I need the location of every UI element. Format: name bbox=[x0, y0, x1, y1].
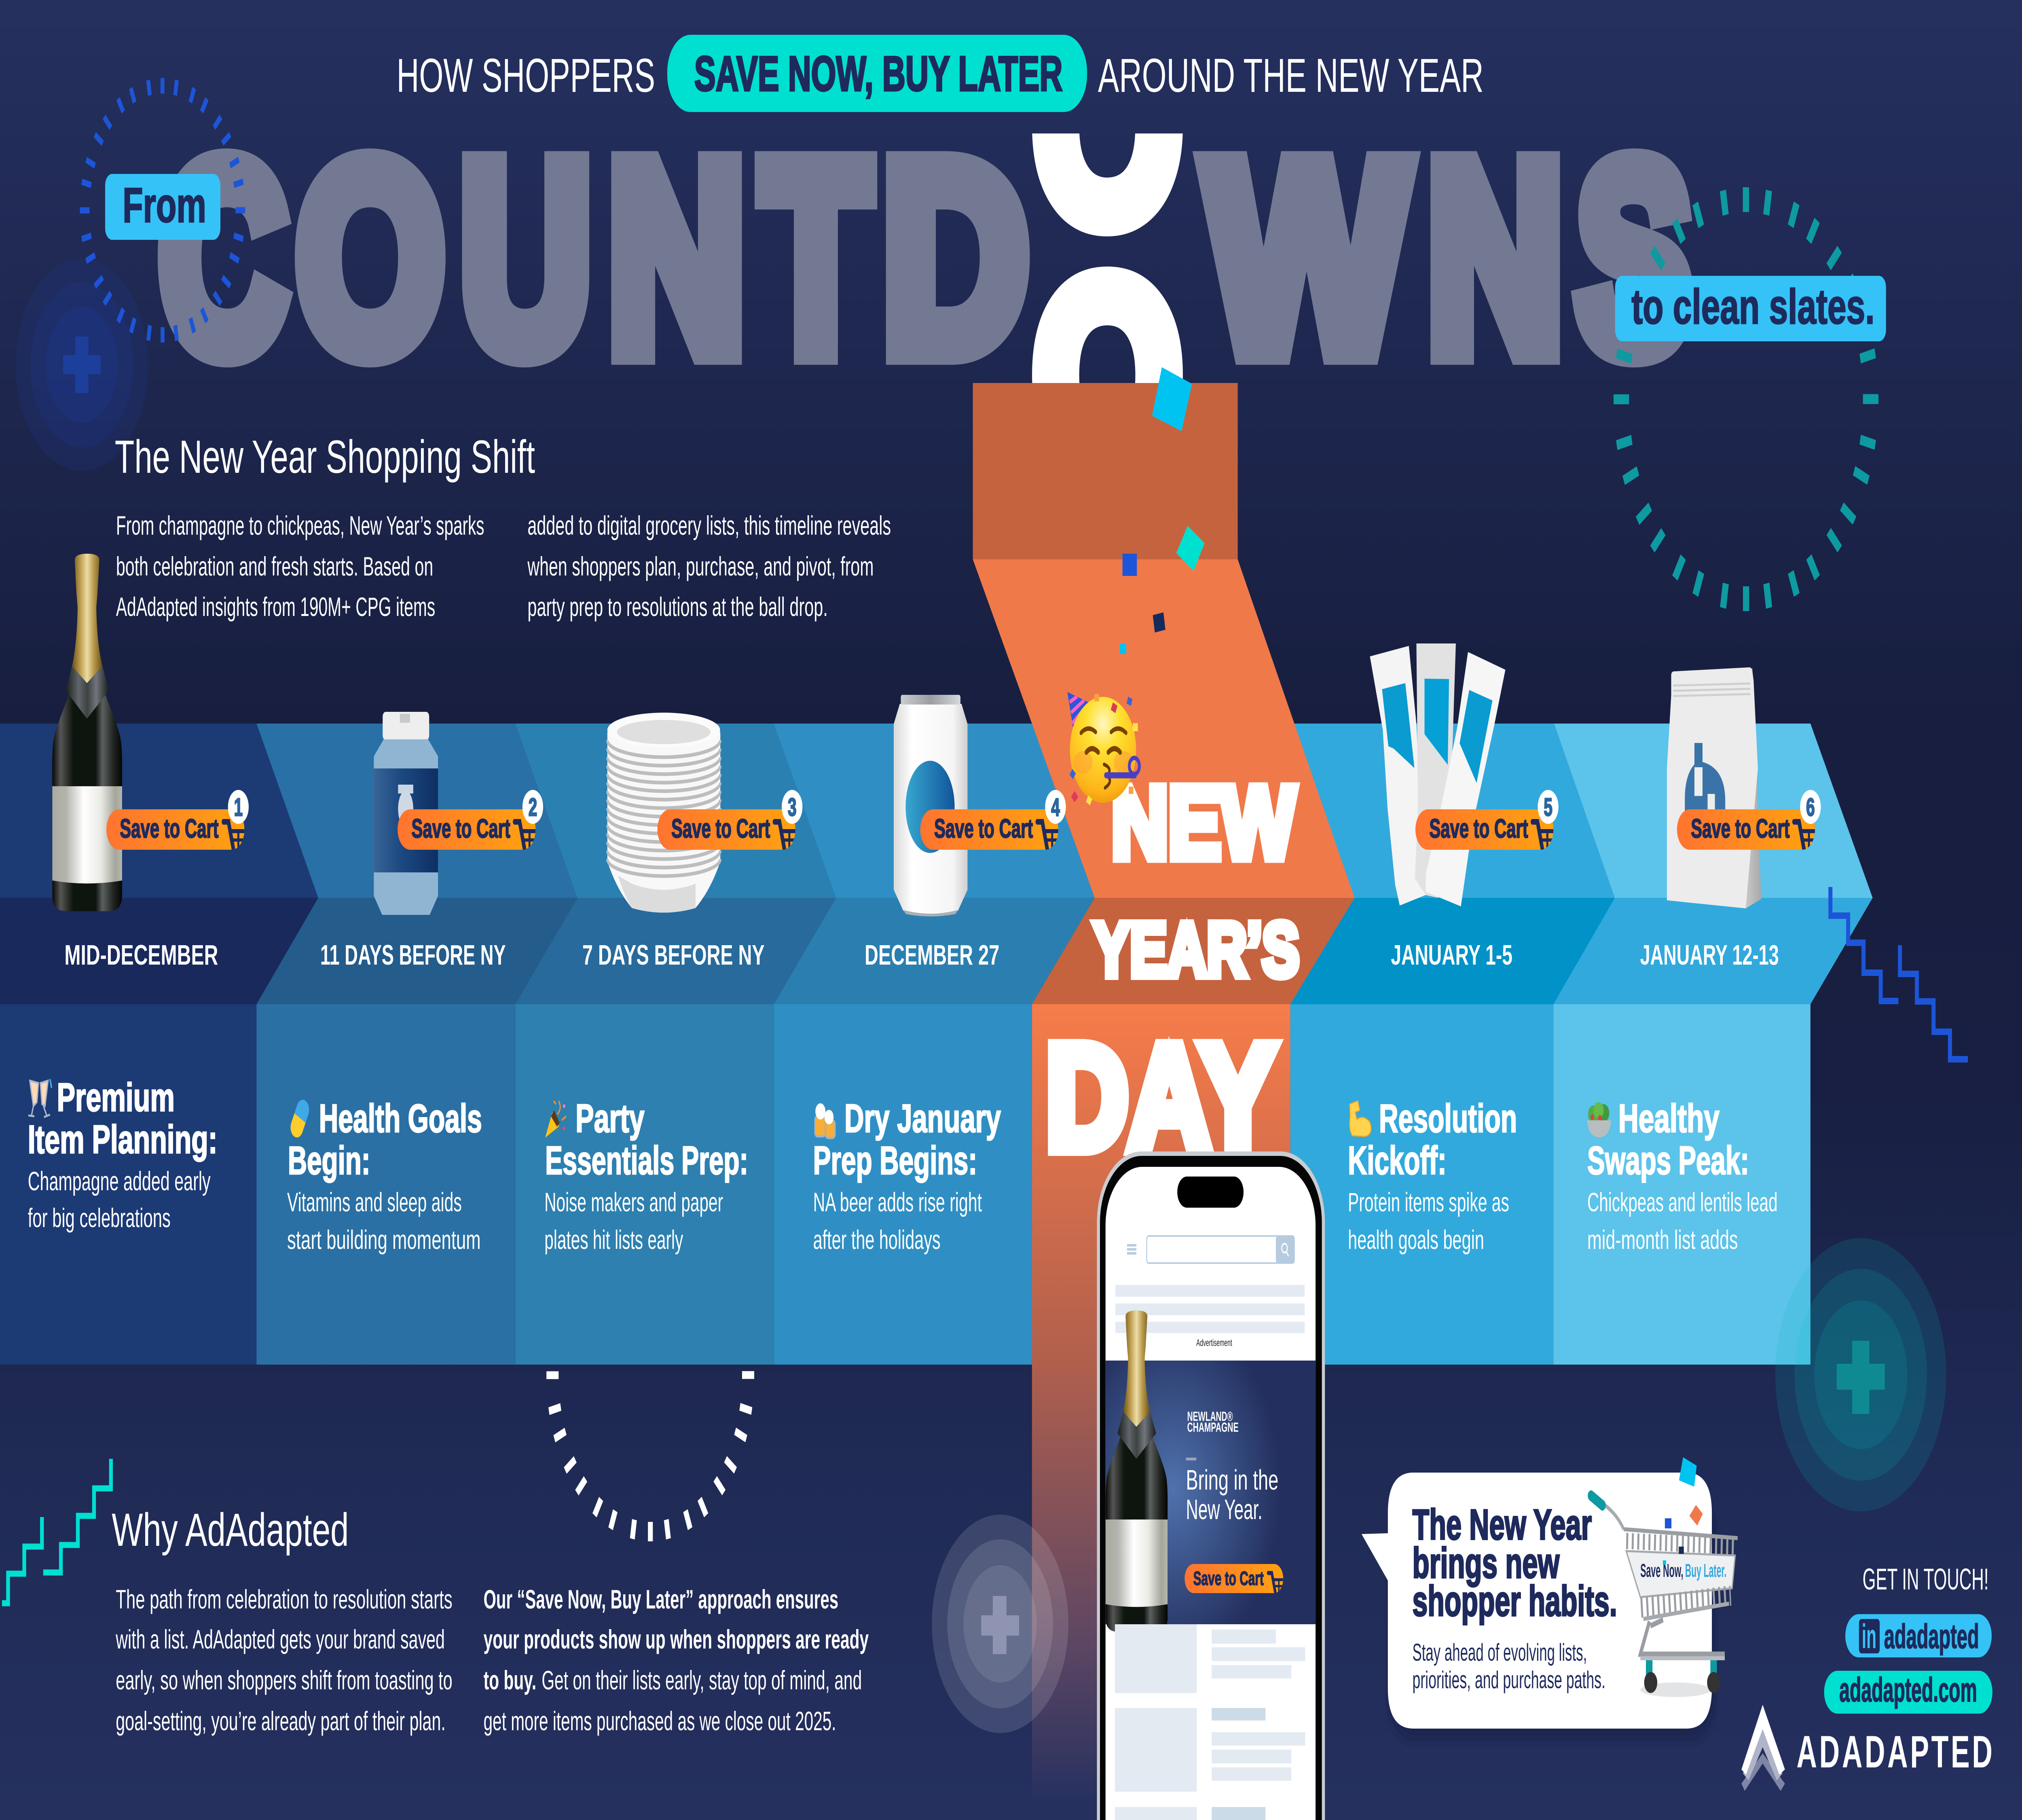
plus target: top left bbox=[16, 259, 148, 471]
badge: save to cart 2: 2 bbox=[529, 793, 537, 821]
orange label band bbox=[1032, 898, 1354, 1004]
search box bbox=[1147, 1236, 1294, 1263]
logo: AdAdapted bbox=[1741, 1705, 1992, 1791]
header line bbox=[397, 35, 1484, 112]
product: water bottle bbox=[374, 712, 438, 915]
ad save to cart button: Save to Cart bbox=[1193, 1568, 1264, 1589]
panel: resolution kickoff bbox=[1348, 1096, 1517, 1255]
heading: YEAR'S: YEAR’S bbox=[1093, 907, 1299, 993]
bubble shape bbox=[1362, 1473, 1712, 1729]
linkedin pill: in bbox=[1862, 1617, 1876, 1655]
brand name bbox=[1187, 1409, 1238, 1435]
panel text bbox=[1348, 1187, 1509, 1255]
website pill: adadapted.com bbox=[1839, 1671, 1977, 1709]
panel: healthy swaps peak: Swaps Peak: bbox=[1587, 1139, 1749, 1183]
panel text: after the holidays bbox=[813, 1225, 941, 1255]
timeline date labels: MID-DECEMBER bbox=[64, 940, 218, 971]
panel title: Dry January bbox=[844, 1096, 1001, 1141]
badge: save to cart 3: Save to Cart bbox=[671, 813, 770, 843]
brand name: NEWLAND® bbox=[1187, 1409, 1233, 1424]
stair line: teal bbox=[2, 1459, 111, 1603]
intro left column: From champagne to chickpeas, New Year’s sparks bbox=[116, 510, 484, 540]
tag: From: From bbox=[123, 178, 206, 233]
badge: save to cart 5 bbox=[1415, 790, 1559, 851]
timeline date labels: JANUARY 12-13 bbox=[1640, 940, 1779, 971]
panel text: NA beer adds rise right bbox=[813, 1187, 982, 1217]
body left column: goal-setting, you’re already part of their plan. bbox=[116, 1706, 446, 1736]
product: champagne bottle bbox=[52, 554, 122, 911]
chevron 4 bbox=[758, 724, 1095, 1004]
plus target: right teal bbox=[1775, 1238, 1946, 1511]
chevron 5 bbox=[1238, 724, 1615, 1004]
panel text bbox=[287, 1187, 481, 1255]
product: stick packets bbox=[1370, 643, 1505, 906]
browser menu icon bbox=[1127, 1245, 1136, 1253]
title: COUNTDOWNS: U bbox=[461, 107, 591, 408]
stair line: blue bbox=[1830, 887, 1968, 1059]
header text left: HOW SHOPPERS bbox=[397, 49, 655, 102]
body right column bbox=[484, 1584, 869, 1736]
plus target: bottom white bbox=[932, 1515, 1068, 1733]
phone mockup bbox=[1097, 1151, 1325, 1820]
advertisement label: Advertisement bbox=[1196, 1338, 1232, 1348]
badge: save to cart 4: Save to Cart bbox=[934, 813, 1033, 843]
panel text: Protein items spike as bbox=[1348, 1187, 1509, 1217]
product: can bbox=[894, 695, 967, 916]
bubble text: priorities, and purchase paths. bbox=[1412, 1666, 1605, 1693]
panel: party essentials prep bbox=[544, 1096, 748, 1255]
panel text: start building momentum bbox=[287, 1225, 481, 1255]
heading: DAY: DAY bbox=[1046, 1014, 1276, 1181]
timeline date labels: 11 DAYS BEFORE NY bbox=[320, 940, 506, 971]
body right column: Our “Save Now, Buy Later” approach ensures bbox=[484, 1584, 838, 1614]
title: falling white letter O (lower): O bbox=[1034, 225, 1181, 526]
panel text bbox=[1587, 1187, 1778, 1255]
header text right: AROUND THE NEW YEAR bbox=[1098, 49, 1484, 102]
panel text: mid-month list adds bbox=[1587, 1225, 1738, 1255]
logo wordmark: ADADAPTED bbox=[1796, 1726, 1992, 1777]
chevron 6 bbox=[1516, 724, 1873, 1004]
badge: save to cart 2: Save to Cart bbox=[412, 813, 510, 843]
product: pouch bag bbox=[1667, 667, 1761, 908]
product: stack of plates bbox=[607, 713, 720, 912]
tag: to clean slates bbox=[1615, 276, 1886, 341]
body right column: to buy. bbox=[484, 1665, 536, 1695]
callout: speech bubble bbox=[1362, 1457, 1738, 1747]
cart label: Buy Later. bbox=[1685, 1560, 1726, 1581]
chevron 3 bbox=[506, 724, 836, 1004]
badge: save to cart 2 bbox=[398, 790, 543, 851]
panel text: Chickpeas and lentils lead bbox=[1587, 1187, 1778, 1217]
intro left column: both celebration and fresh starts. Based on bbox=[116, 551, 433, 581]
body left column: The path from celebration to resolution starts bbox=[116, 1584, 453, 1614]
bubble headline: shopper habits. bbox=[1412, 1577, 1617, 1625]
badge: save to cart 5: 5 bbox=[1544, 793, 1552, 821]
body right column: your products show up when shoppers are ready bbox=[484, 1624, 869, 1654]
title: COUNTDOWNS: S bbox=[1577, 107, 1691, 408]
timeline date labels: JANUARY 1-5 bbox=[1391, 940, 1512, 971]
orange fading column bbox=[1032, 1004, 1290, 1805]
title: COUNTDOWNS: D bbox=[883, 108, 1028, 408]
dashed ring: blue bbox=[80, 78, 245, 343]
badge: save to cart 3 bbox=[658, 790, 802, 851]
badge: save to cart 4 bbox=[920, 790, 1066, 851]
heading: The New Year Shopping Shift bbox=[115, 431, 535, 483]
dynamic island bbox=[1177, 1177, 1244, 1208]
panel text: for big celebrations bbox=[28, 1203, 171, 1233]
bubble confetti bbox=[1663, 1457, 1703, 1565]
get in touch: GET IN TOUCH! bbox=[1863, 1563, 1989, 1596]
panel text: Champagne added early bbox=[28, 1166, 211, 1196]
timeline band: chevrons bbox=[0, 724, 1873, 1004]
panel: dry january prep begins bbox=[813, 1096, 1001, 1255]
badge: save to cart 5: Save to Cart bbox=[1429, 813, 1528, 843]
panel text: plates hit lists early bbox=[544, 1225, 683, 1255]
icon: party popper bbox=[545, 1101, 566, 1138]
panel text: Vitamins and sleep aids bbox=[287, 1187, 462, 1217]
heading: Why AdAdapted bbox=[112, 1504, 349, 1556]
intro right column: added to digital grocery lists, this timeline reveals bbox=[527, 510, 891, 540]
cart label bbox=[1640, 1560, 1726, 1581]
badge: save to cart 6: Save to Cart bbox=[1691, 813, 1790, 843]
ad headline: Bring in the bbox=[1186, 1464, 1278, 1496]
ad banner bbox=[1106, 1310, 1316, 1632]
badge: save to cart 4: 4 bbox=[1051, 793, 1060, 821]
intro left column bbox=[116, 510, 484, 622]
orange fold rectangle bbox=[973, 383, 1238, 559]
badge: save to cart 1: Save to Cart bbox=[120, 813, 219, 843]
orange New Year's Day column bbox=[973, 383, 1354, 1805]
panel title: Premium bbox=[57, 1075, 175, 1120]
panel: party essentials prep: Essentials Prep: bbox=[545, 1139, 748, 1183]
phone body bbox=[1097, 1151, 1325, 1820]
bubble text bbox=[1412, 1639, 1605, 1693]
icon: pill bbox=[288, 1096, 311, 1141]
panel text bbox=[813, 1187, 982, 1255]
ad headline bbox=[1186, 1464, 1278, 1526]
badge: save to cart 3: 3 bbox=[788, 793, 797, 821]
emoji: partying face bbox=[1067, 692, 1140, 805]
icon: clinking glasses bbox=[28, 1079, 52, 1117]
intro right column: party prep to resolutions at the ball drop. bbox=[527, 592, 828, 622]
title: COUNTDOWNS: W bbox=[1207, 107, 1409, 408]
dashed half ring: white bbox=[546, 1371, 754, 1541]
timeline date labels: DECEMBER 27 bbox=[865, 940, 999, 971]
header pill: SAVE NOW, BUY LATER bbox=[694, 46, 1063, 101]
tag: From bbox=[105, 174, 220, 240]
title: COUNTDOWNS: C bbox=[160, 108, 286, 408]
phone screen bbox=[1106, 1167, 1316, 1820]
tag: to clean slates: to clean slates. bbox=[1631, 279, 1875, 334]
cart label: Save Now, bbox=[1640, 1560, 1684, 1581]
text block: The New Year Shopping Shift bbox=[115, 431, 891, 622]
bubble shadow bbox=[1385, 1488, 1719, 1747]
body left column bbox=[116, 1584, 453, 1736]
bubble text: Stay ahead of evolving lists, bbox=[1412, 1639, 1587, 1666]
ad bottle bbox=[1106, 1310, 1168, 1632]
panel: resolution kickoff: Kickoff: bbox=[1348, 1139, 1447, 1183]
title: COUNTDOWNS bbox=[160, 107, 1691, 408]
intro right column: when shoppers plan, purchase, and pivot, from bbox=[527, 551, 874, 581]
header pill bbox=[667, 35, 1087, 112]
orange slanted ribbon bbox=[973, 559, 1354, 898]
intro right column bbox=[527, 510, 891, 622]
info panels background bbox=[0, 1004, 1810, 1365]
icon: salad bowl bbox=[1587, 1102, 1611, 1137]
body right column: get more items purchased as we close out 2025. bbox=[484, 1706, 836, 1736]
body left column: early, so when shoppers shift from toasting to bbox=[116, 1665, 453, 1695]
panel text bbox=[544, 1187, 723, 1255]
chevron 2 bbox=[253, 724, 577, 1004]
panel: health goals begin: Begin: bbox=[288, 1139, 370, 1183]
title: COUNTDOWNS: T bbox=[762, 107, 870, 408]
placeholder lines bbox=[1115, 1285, 1305, 1333]
panel: dry january prep begins: Prep Begins: bbox=[813, 1139, 977, 1183]
panel: premium item planning bbox=[28, 1075, 218, 1233]
panel text: health goals begin bbox=[1348, 1225, 1484, 1255]
timeline date labels: 7 DAYS BEFORE NY bbox=[582, 940, 765, 971]
chevron 1 bbox=[0, 724, 318, 1004]
bubble headline: brings new bbox=[1412, 1539, 1559, 1587]
title: COUNTDOWNS: O bbox=[297, 107, 444, 408]
icon: flexed arm bbox=[1349, 1101, 1371, 1136]
title: COUNTDOWNS: N bbox=[609, 107, 745, 408]
body left column: with a list. AdAdapted gets your brand saved bbox=[116, 1624, 445, 1654]
panel: health goals begin bbox=[287, 1096, 482, 1255]
contact block bbox=[1824, 1563, 1992, 1714]
linkedin pill: adadapted bbox=[1884, 1617, 1979, 1655]
panel: premium item planning: Item Planning: bbox=[28, 1117, 218, 1162]
heading: NEW: NEW bbox=[1111, 765, 1295, 880]
badge: save to cart 6: 6 bbox=[1806, 793, 1815, 821]
panel title: Party bbox=[575, 1096, 645, 1141]
confetti bbox=[1120, 367, 1205, 654]
placeholder content bbox=[1115, 1624, 1305, 1820]
icon: beer mugs bbox=[815, 1103, 835, 1138]
panel title: Health Goals bbox=[319, 1096, 482, 1141]
panel: healthy swaps peak bbox=[1587, 1096, 1778, 1255]
intro left column: AdAdapted insights from 190M+ CPG items bbox=[116, 592, 435, 622]
text block: Why AdAdapted bbox=[112, 1504, 869, 1736]
panel title: Resolution bbox=[1379, 1096, 1517, 1141]
ad headline: New Year. bbox=[1186, 1494, 1263, 1526]
brand name: CHAMPAGNE bbox=[1187, 1420, 1239, 1435]
badge: save to cart 6 bbox=[1677, 790, 1821, 851]
body right column: Get on their lists early, stay top of mind, and bbox=[541, 1665, 862, 1695]
dashed ring: teal bbox=[1614, 187, 1878, 611]
panel text: Noise makers and paper bbox=[544, 1187, 723, 1217]
linkedin pill bbox=[1845, 1614, 1992, 1657]
icon: shopping cart bbox=[1591, 1496, 1738, 1697]
timeline date labels bbox=[64, 940, 1779, 971]
badge: save to cart 1: 1 bbox=[234, 793, 243, 821]
panel text bbox=[28, 1166, 211, 1233]
badge: save to cart 1 bbox=[106, 790, 249, 851]
ad save to cart button bbox=[1184, 1564, 1283, 1594]
bubble headline bbox=[1412, 1500, 1617, 1625]
bubble headline: The New Year bbox=[1412, 1500, 1592, 1549]
panel title: Healthy bbox=[1618, 1096, 1720, 1141]
logo mark bbox=[1741, 1705, 1785, 1791]
title: COUNTDOWNS: N bbox=[1428, 107, 1563, 408]
